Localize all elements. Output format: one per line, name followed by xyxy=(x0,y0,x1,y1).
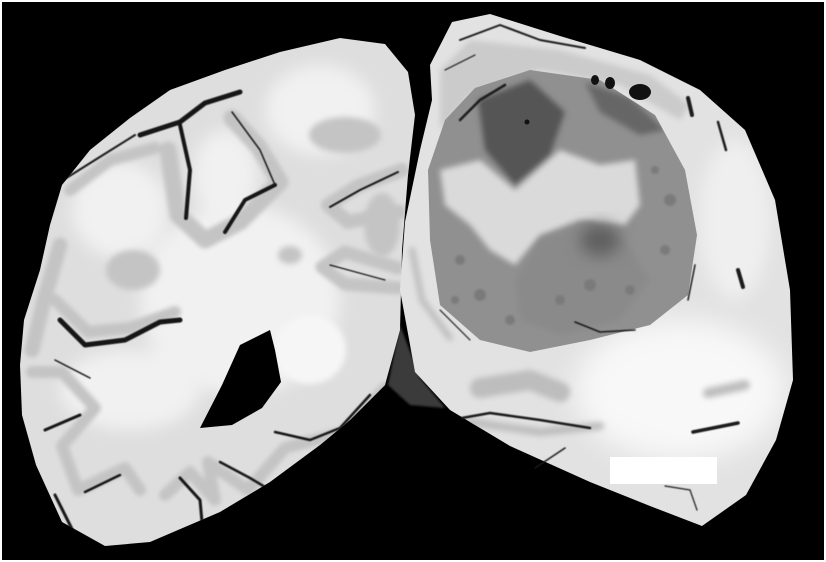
right shaded upper cortex xyxy=(440,40,690,130)
left grey matter ribbon xyxy=(32,118,402,500)
dark tissue between hemispheres xyxy=(388,325,445,408)
tumour dark upper region xyxy=(478,80,565,185)
left pale grey nuclei xyxy=(106,117,400,290)
left sulci xyxy=(45,92,398,535)
bright white matter xyxy=(575,320,785,460)
right hemisphere xyxy=(395,0,805,540)
left white matter core xyxy=(60,65,375,430)
upper dark cysts xyxy=(524,75,651,124)
left hemisphere body xyxy=(20,38,415,546)
tumour pale central area xyxy=(440,150,640,265)
right sulci xyxy=(440,25,743,510)
tumour mass xyxy=(428,70,697,352)
left hemisphere xyxy=(20,38,415,546)
right hemisphere body xyxy=(395,0,805,540)
right grey ribbon xyxy=(412,250,745,432)
tumour mottled texture xyxy=(451,166,676,325)
tumour grey lower region xyxy=(586,220,592,224)
white radiating streaks xyxy=(290,326,347,385)
tumour xyxy=(428,70,697,352)
white scale bar xyxy=(610,457,717,484)
left lateral ventricle xyxy=(200,330,281,428)
